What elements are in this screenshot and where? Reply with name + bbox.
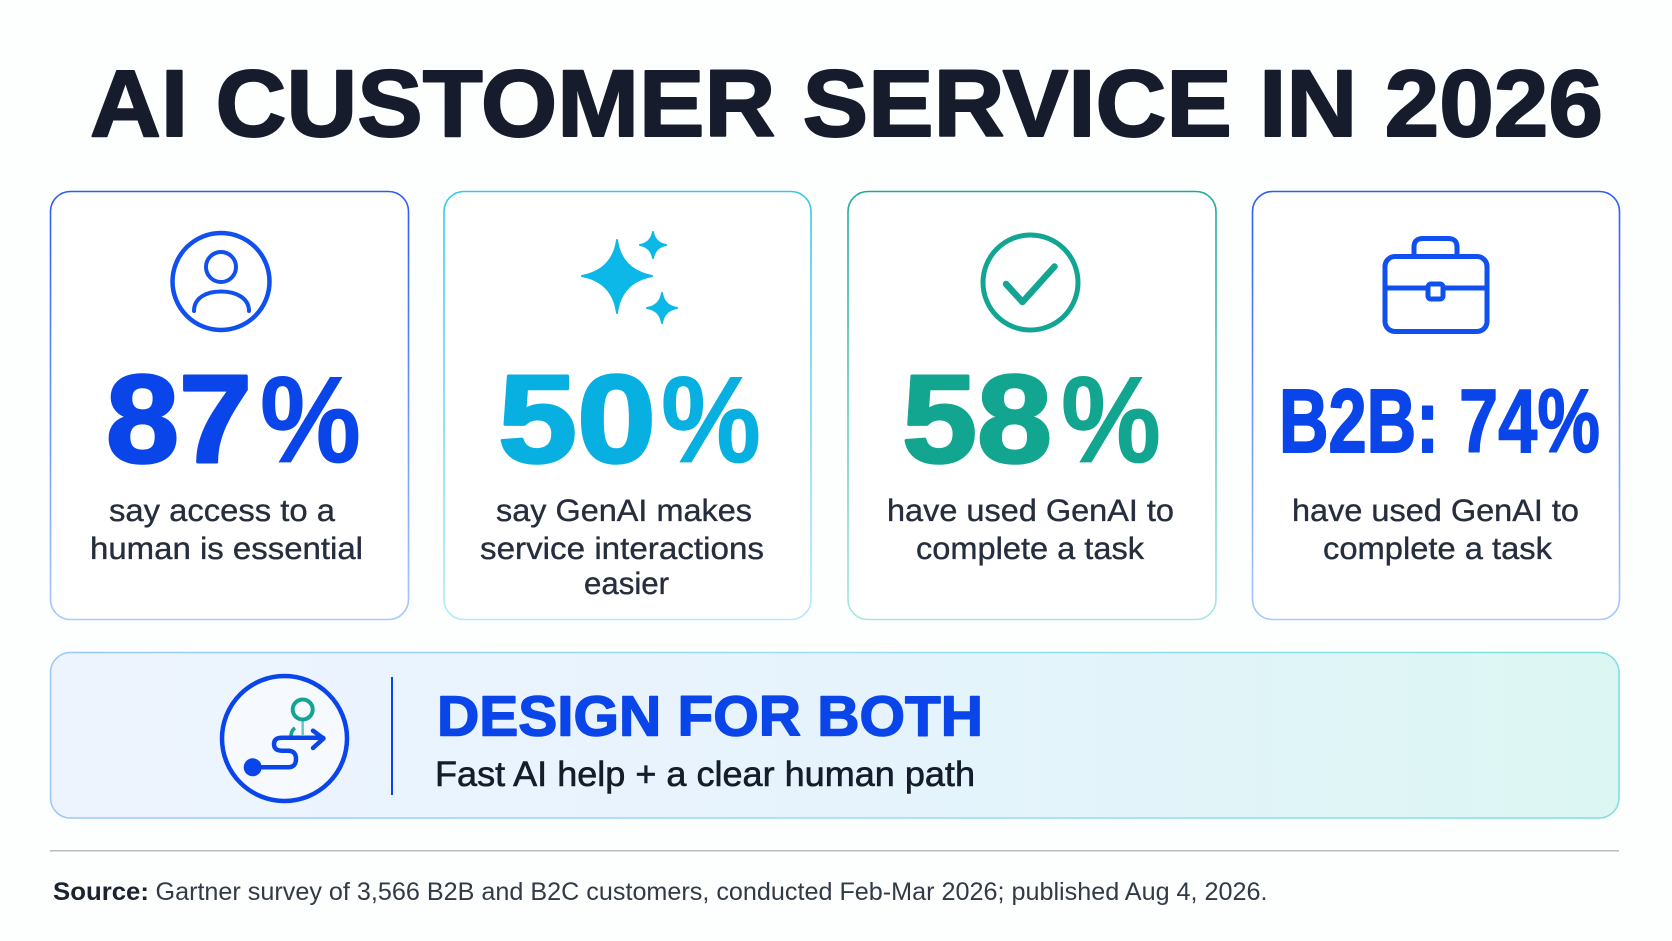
stat: B2B 74%: 74% bbox=[1459, 372, 1600, 472]
text: 50% description: easier bbox=[584, 566, 669, 601]
stat: B2B 74% bbox=[1279, 372, 1600, 472]
stat: 87%: 87 bbox=[106, 350, 252, 489]
stat: 58%: % bbox=[1061, 352, 1161, 489]
stat: B2B 74%: B2B: bbox=[1279, 372, 1439, 472]
panel: B2B 74% stat card bbox=[1252, 192, 1620, 620]
title: AI CUSTOMER SERVICE IN 2026 bbox=[90, 51, 1603, 157]
text: B2B description: have used GenAI to bbox=[1292, 493, 1579, 528]
text: B2B description bbox=[1292, 493, 1579, 566]
text: 58% description: complete a task bbox=[916, 531, 1145, 566]
text: 87% description bbox=[90, 493, 363, 566]
text: 50% description: say GenAI makes bbox=[496, 493, 752, 528]
text: 87% description: human is essential bbox=[90, 531, 363, 566]
panel: 87% stat card bbox=[50, 192, 408, 620]
panel: 50% stat card bbox=[444, 192, 811, 620]
text: 87% description: say access to a bbox=[109, 493, 336, 528]
icon: check in circle bbox=[983, 235, 1078, 330]
text: 50% description: service interactions bbox=[480, 531, 764, 566]
source note: Source: bbox=[53, 878, 149, 906]
text: 50% description bbox=[480, 493, 764, 601]
stat: 58% bbox=[902, 350, 1161, 489]
heading: design for both: DESIGN FOR BOTH bbox=[437, 684, 983, 748]
stat: 87% bbox=[106, 350, 361, 489]
stat: 50% bbox=[498, 350, 761, 489]
stat: 50%: % bbox=[661, 352, 761, 489]
panel: 58% stat card bbox=[848, 192, 1216, 620]
stat: 87%: % bbox=[260, 352, 361, 489]
stat: 50%: 50 bbox=[498, 350, 656, 489]
stat: 58%: 58 bbox=[902, 350, 1052, 489]
icon: person in circle bbox=[172, 233, 270, 330]
icon: briefcase bbox=[1385, 238, 1487, 332]
text: 58% description bbox=[887, 493, 1174, 566]
text: 58% description: have used GenAI to bbox=[887, 493, 1174, 528]
text: B2B description: complete a task bbox=[1323, 531, 1553, 566]
icon: route with pin bbox=[222, 676, 347, 801]
panel: design for both banner bbox=[50, 652, 1619, 818]
icon: sparkles bbox=[582, 232, 677, 323]
source note: Gartner survey of 3,566 B2B and B2C customers, conducted Feb-Mar 2026; published Aug 4, 2026. bbox=[156, 878, 1268, 906]
text: banner subtitle: Fast AI help + a clear human path bbox=[435, 755, 975, 794]
divider bbox=[391, 677, 393, 795]
